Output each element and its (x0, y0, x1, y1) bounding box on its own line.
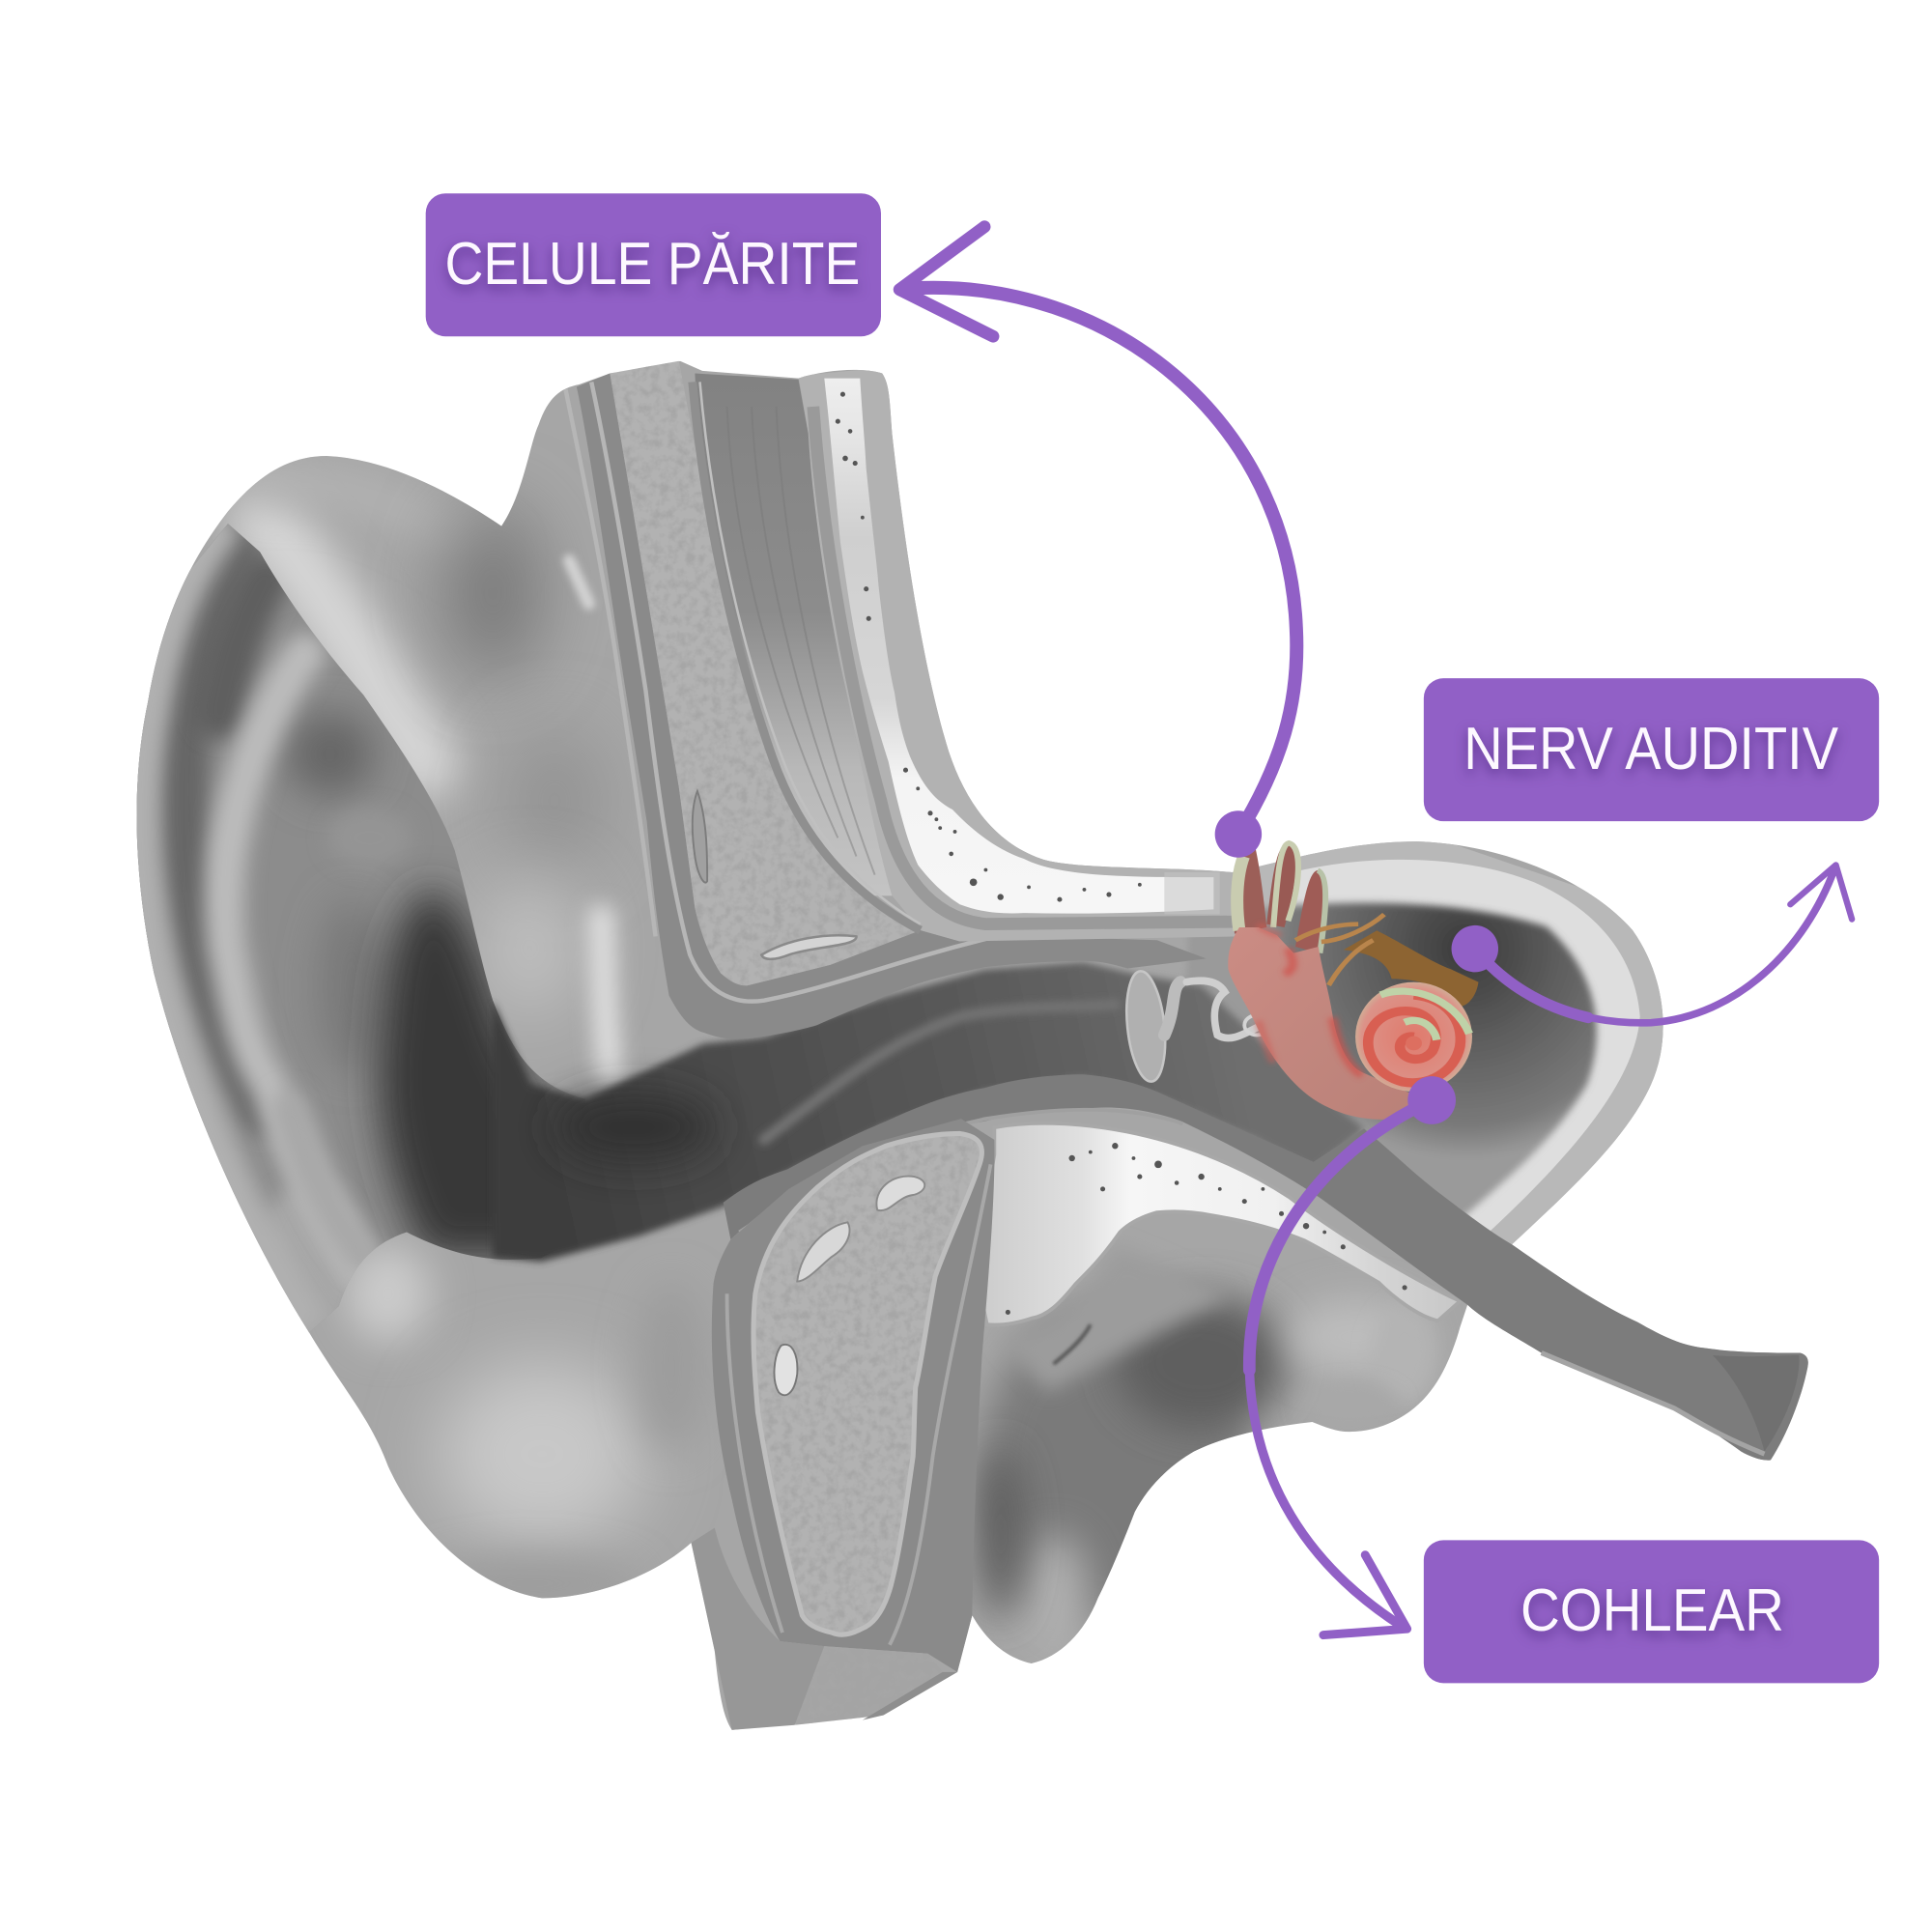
lower block outer band (712, 1119, 994, 1672)
label box (426, 193, 881, 336)
canal interior light stripe (764, 1005, 1115, 1140)
label text: NERV AUDITIV (1463, 715, 1838, 782)
nerve branches (1295, 915, 1384, 985)
auditory nerve (1344, 930, 1478, 1007)
cut base texture (795, 1648, 922, 1725)
lower region below bone (1020, 1265, 1436, 1439)
cut base of block (692, 1528, 824, 1730)
label box (1424, 1540, 1879, 1683)
ear silhouette base (111, 345, 1836, 1749)
lower canal wall band and tube (724, 1074, 1808, 1461)
pinna outer shading (265, 484, 1251, 1658)
eardrum and ossicles (1122, 969, 1269, 1084)
inner ear cavity (1182, 903, 1597, 1220)
label text: CELULE PĂRITE (444, 230, 860, 298)
lower canal band light line (739, 1110, 1182, 1233)
dark band next to muscle (813, 407, 1238, 924)
outer block light lines (727, 1164, 991, 1645)
upper canal wall band (577, 373, 1207, 1039)
skin fold lines (565, 382, 985, 1002)
lower bone layer (980, 1123, 1460, 1324)
canal interior (493, 962, 1364, 1262)
upper cartilage block (611, 361, 915, 985)
bone layer backing (799, 365, 1238, 941)
tube far end shading (1713, 1355, 1799, 1452)
concha and scapha hollow (137, 524, 579, 1333)
right lower bands (863, 1672, 957, 1720)
upper bone white layer (824, 379, 1220, 914)
muscle layer (693, 373, 921, 930)
tube lower light edge (1542, 1353, 1765, 1454)
cochlea spiral (1355, 982, 1472, 1092)
cavity bone ring (1260, 841, 1663, 1244)
cochlea and semicircular canals (colour) (1228, 843, 1478, 1120)
label box (1424, 678, 1879, 821)
vestibule and cochlear duct (1228, 927, 1414, 1120)
arrow to Cohlear (1249, 1076, 1456, 1635)
semicircular canals (1234, 845, 1266, 934)
label: Celule părite (426, 193, 881, 336)
lower cartilage block (752, 1130, 984, 1637)
ear illustration (111, 345, 1836, 1749)
canal interior shadow (554, 1093, 715, 1162)
label: Nerv auditiv (1424, 678, 1879, 821)
arrow to Nerv auditiv (1452, 865, 1852, 1023)
label: Cohlear (1424, 1540, 1879, 1683)
arrow to Celule părite (899, 227, 1296, 858)
label text: COHLEAR (1520, 1577, 1784, 1644)
